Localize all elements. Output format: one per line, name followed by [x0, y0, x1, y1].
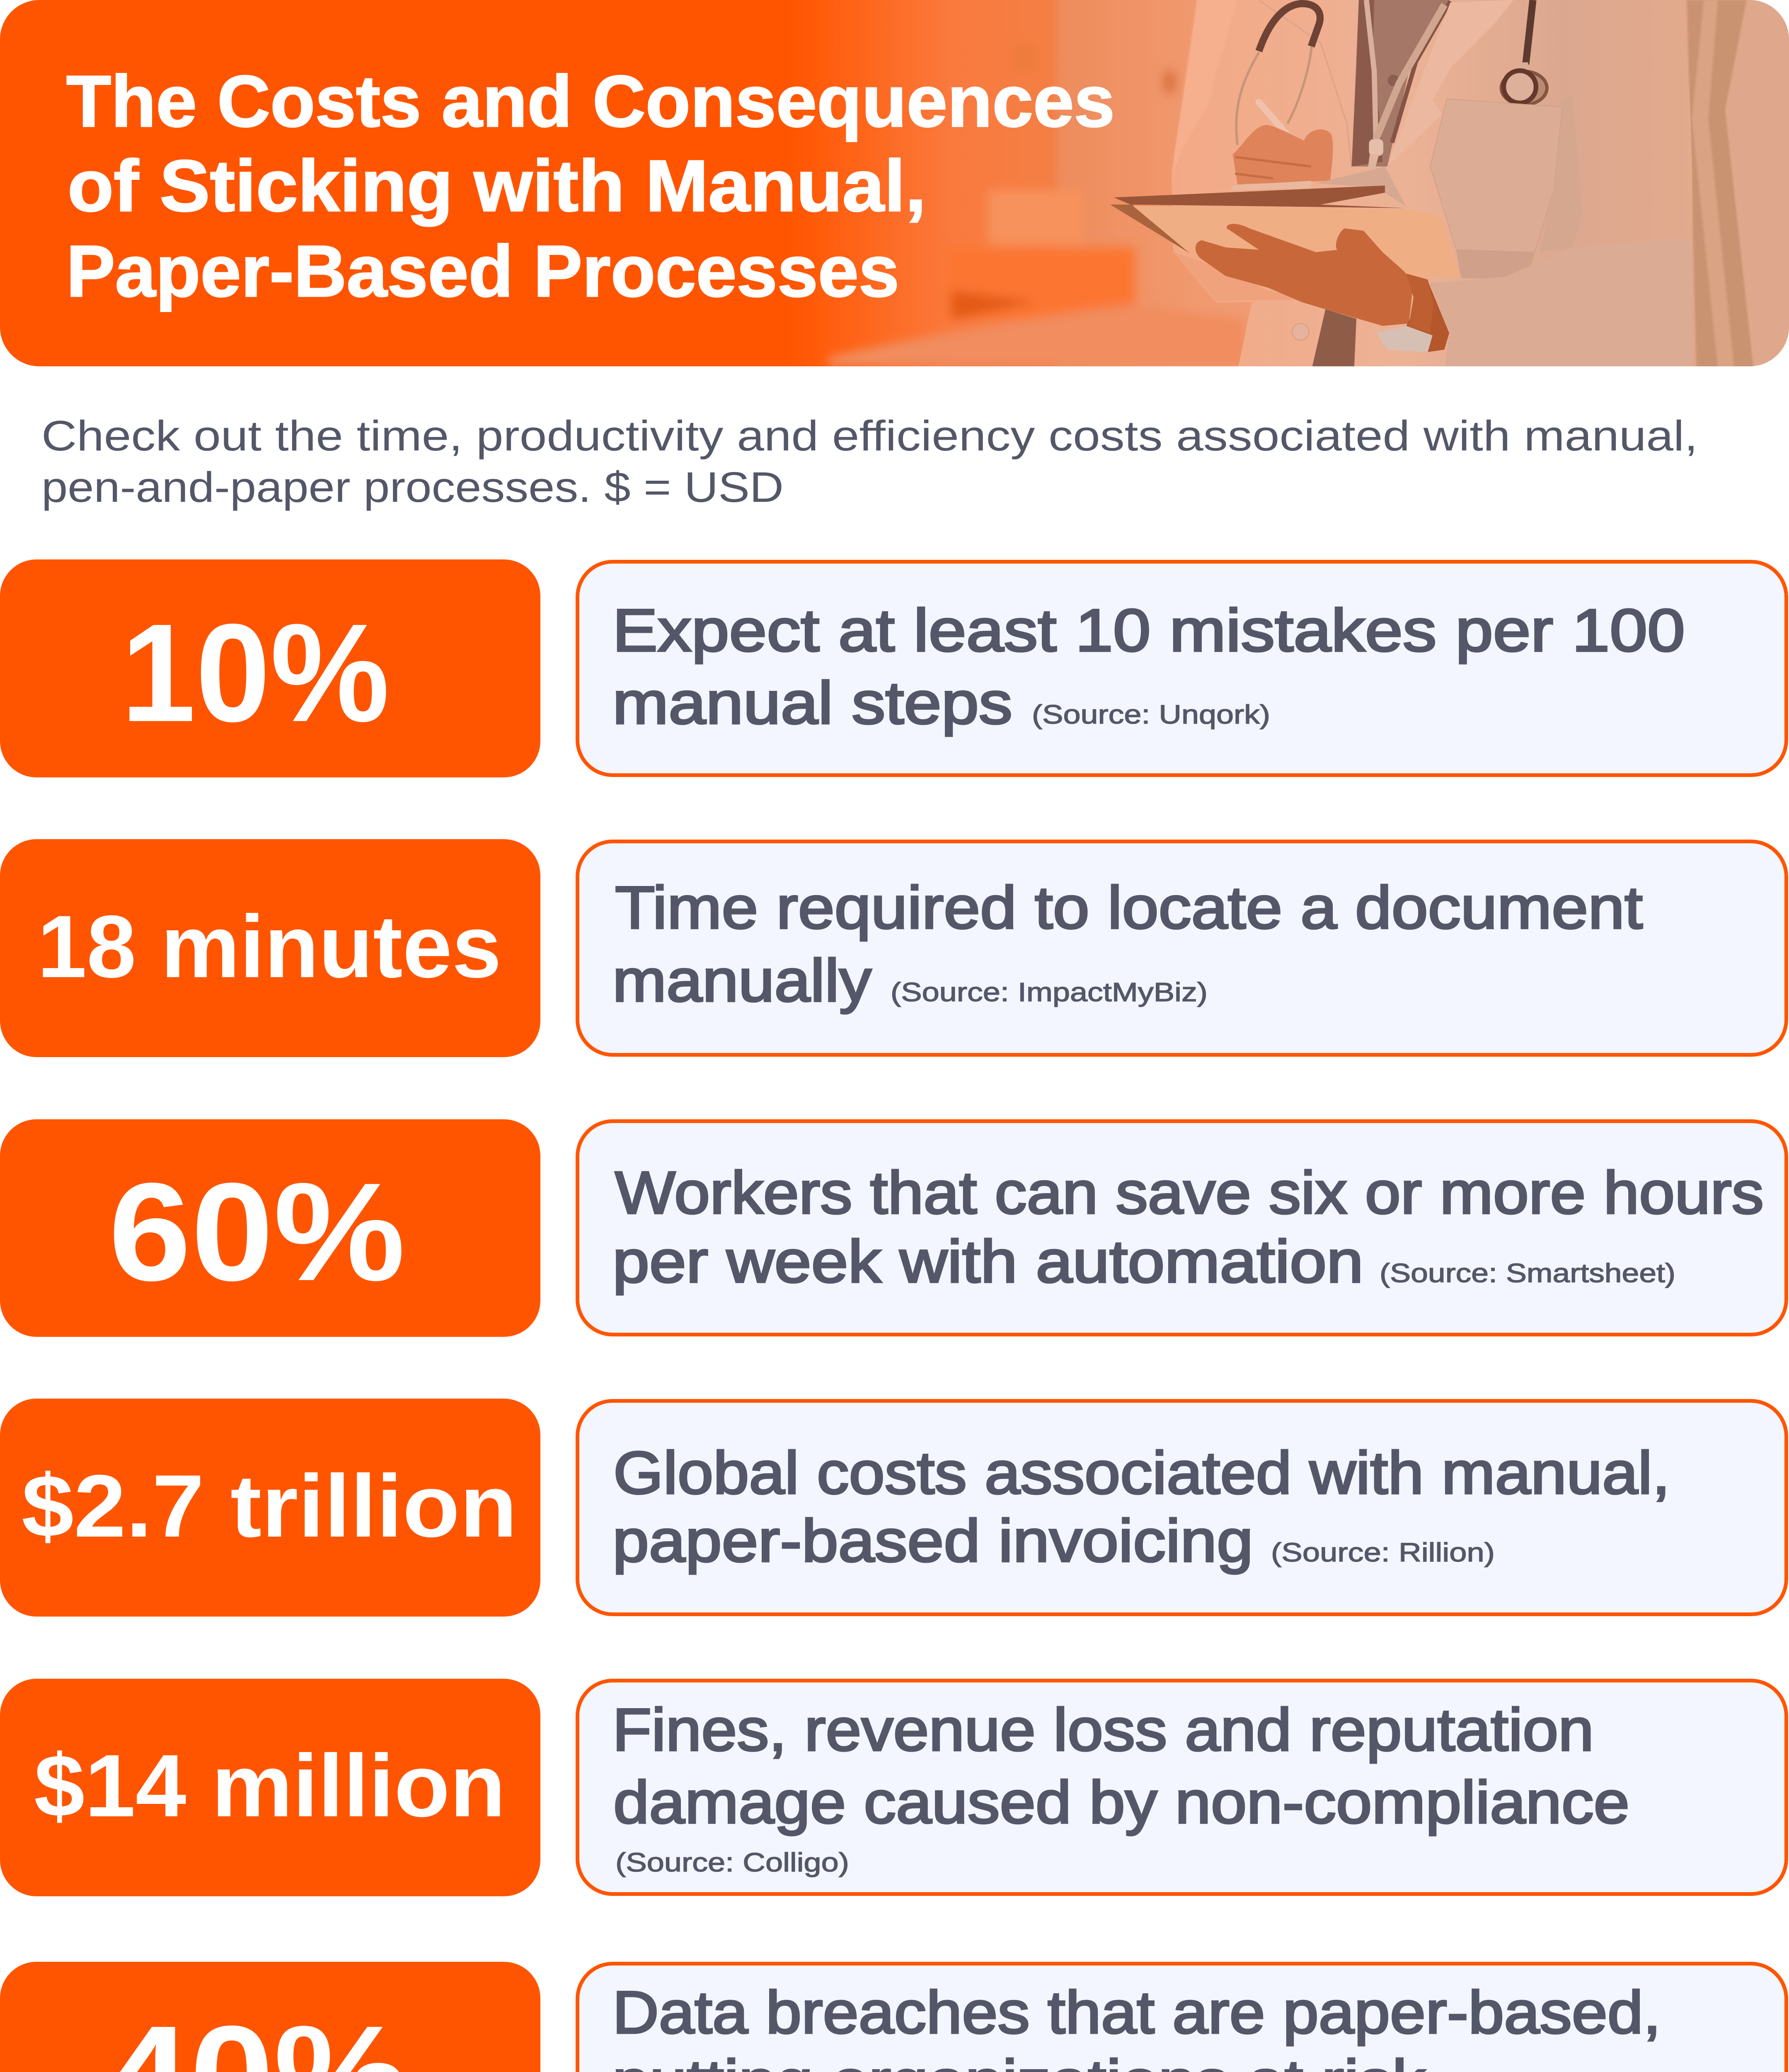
stat pill: 60%: 60% [109, 1154, 405, 1310]
title: The Costs and Consequences [66, 61, 1115, 142]
card: locate a document: (Source: ImpactMyBiz) [891, 977, 1208, 1007]
card: locate a document: Time required to locate a document [615, 874, 1643, 941]
card: data breaches [578, 1963, 1786, 2072]
card: global invoicing costs: Global costs associated with manual, [613, 1439, 1670, 1506]
row: 18 minutes [0, 839, 1786, 1057]
card: workers saving time: (Source: Smartsheet) [1380, 1258, 1675, 1288]
header photo: doctor writing on clipboard with orange tint [0, 0, 1789, 371]
intro text: pen-and-paper processes. $ = USD [41, 463, 784, 511]
intro text: Check out the time, productivity and efficiency costs associated with manual, [41, 412, 1698, 460]
title: of Sticking with Manual, [68, 145, 926, 227]
card: non-compliance: (Source: Colligo) [615, 1847, 849, 1877]
card: non-compliance: damage caused by non-compliance [613, 1769, 1629, 1836]
card: mistakes [578, 562, 1786, 775]
card: locate a document: manually [612, 947, 872, 1014]
card: global invoicing costs [578, 1401, 1786, 1615]
stat pill: 10%: 10% [121, 595, 390, 751]
card: mistakes: manual steps [612, 669, 1012, 736]
card: workers saving time: per week with automation [612, 1228, 1363, 1295]
stat pill: 18 minutes: 18 minutes [37, 897, 501, 996]
stat pill: $14 million: $14 million [34, 1736, 506, 1835]
title [66, 61, 1115, 312]
header banner [0, 0, 1789, 371]
card: global invoicing costs: (Source: Rillion) [1271, 1537, 1495, 1567]
row: $14 million [0, 1679, 1786, 1896]
row: $2.7 trillion [0, 1399, 1786, 1617]
stat pill: 60% [0, 1119, 540, 1337]
card: mistakes: Expect at least 10 mistakes per 100 [612, 597, 1685, 664]
stat pill: 18 minutes [0, 839, 540, 1057]
card: workers saving time [578, 1121, 1786, 1334]
row: 10% [0, 559, 1786, 777]
stat pill: $2.7 trillion: $2.7 trillion [22, 1457, 517, 1556]
card: non-compliance: Fines, revenue loss and reputation [612, 1696, 1594, 1763]
stat pill: $2.7 trillion [0, 1399, 540, 1617]
stat pill: 40% [0, 1962, 540, 2072]
card: locate a document [578, 841, 1786, 1055]
card: global invoicing costs: paper-based invoicing [612, 1507, 1253, 1574]
card: data breaches: Data breaches that are paper-based, [612, 1979, 1661, 2046]
row: 40% [0, 1962, 1786, 2072]
card: mistakes: (Source: Unqork) [1032, 700, 1270, 729]
card: workers saving time: Workers that can save six or more hours [615, 1159, 1764, 1226]
card: non-compliance [578, 1681, 1786, 1894]
row: 60% [0, 1119, 1786, 1337]
stat pill: $14 million [0, 1679, 540, 1896]
stat pill: 10% [0, 559, 540, 777]
intro text [41, 412, 1698, 511]
title: Paper-Based Processes [66, 231, 899, 312]
